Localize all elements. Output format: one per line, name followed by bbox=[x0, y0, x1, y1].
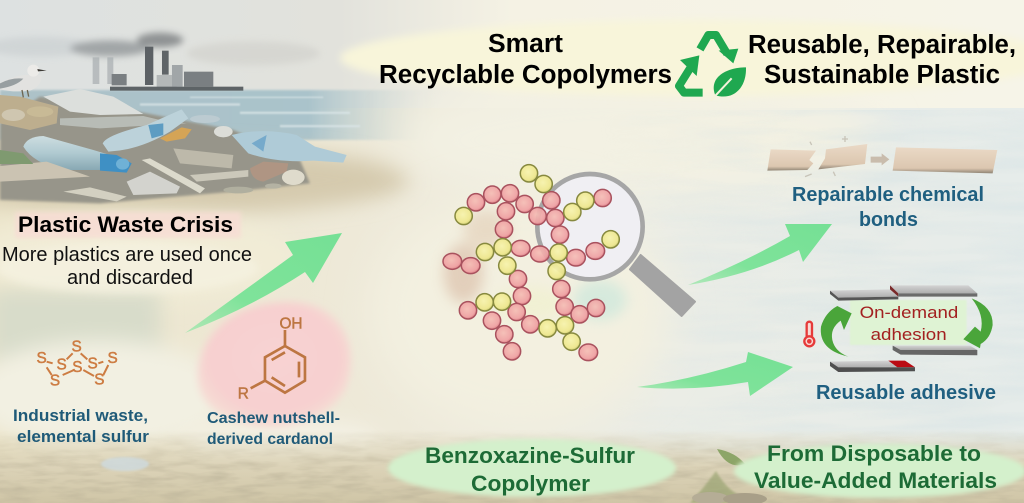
label: from disposable to value-added materials: Value-Added Materials bbox=[754, 468, 997, 493]
factory bbox=[93, 47, 243, 91]
chemical structure: elemental sulfur S8 bbox=[37, 339, 118, 389]
title: smart recyclable copolymers bbox=[379, 30, 672, 89]
chemical structure: elemental sulfur S8: S bbox=[37, 350, 47, 367]
chemical structure: elemental sulfur S8: S bbox=[88, 356, 98, 373]
text: industrial waste, elemental sulfur: elemental sulfur bbox=[17, 428, 150, 446]
chemical structure: cardanol bbox=[238, 316, 305, 403]
colourful haze bbox=[443, 210, 627, 320]
clouds and smoke bbox=[0, 33, 320, 65]
on-demand adhesion text: adhesion bbox=[871, 325, 947, 344]
text: repairable chemical bonds bbox=[792, 184, 984, 231]
chemical structure: elemental sulfur S8: S bbox=[72, 339, 82, 356]
polymer beads bbox=[443, 165, 619, 361]
bottle: right bbox=[232, 131, 347, 163]
on-demand adhesion text bbox=[860, 303, 958, 344]
diagram: on-demand adhesion cycle bbox=[804, 285, 993, 372]
on-demand adhesion text: On-demand bbox=[860, 303, 958, 322]
arrow: feedstocks to copolymer bbox=[185, 233, 342, 333]
label: from disposable to value-added materials bbox=[734, 441, 1024, 498]
illustration: polluted beach with factory, gull and plastic waste bbox=[0, 33, 360, 203]
debris pile bbox=[0, 97, 310, 203]
bottle: large left bbox=[23, 136, 132, 173]
cycle arrows bbox=[821, 298, 993, 357]
chemical structure: elemental sulfur S8: S bbox=[94, 372, 104, 389]
bottle: upper middle bbox=[103, 109, 188, 152]
icon: magnifying glass bbox=[537, 174, 695, 316]
arrow: copolymer to reusable adhesive bbox=[637, 352, 793, 396]
chemical structure: elemental sulfur S8: S bbox=[72, 359, 82, 376]
subtitle: reusable, repairable, sustainable plastic: Reusable, Repairable, bbox=[748, 31, 1016, 59]
chemical structure: cardanol: OH bbox=[279, 316, 302, 333]
icon: recycling arrows with leaf bbox=[679, 35, 746, 101]
subtitle: reusable, repairable, sustainable plastic bbox=[748, 31, 1016, 89]
cashew fruit background bbox=[198, 302, 351, 427]
icon: thermometer bbox=[804, 322, 814, 346]
text block: plastic waste crisis: Plastic Waste Crisis bbox=[18, 212, 233, 237]
chemical structure: cardanol: R bbox=[238, 386, 249, 403]
centre panel bbox=[850, 300, 967, 345]
text: cashew nutshell-derived cardanol bbox=[207, 410, 340, 448]
text block: plastic waste crisis bbox=[0, 212, 258, 294]
adhesive plates bbox=[830, 285, 977, 372]
copolymer under magnifying glass bbox=[443, 165, 695, 361]
title: smart recyclable copolymers: Recyclable Copolymers bbox=[379, 61, 672, 89]
title banner bbox=[340, 20, 1024, 96]
text: repairable chemical bonds: Repairable chemical bbox=[792, 184, 984, 206]
scattered rubbish bbox=[0, 106, 305, 201]
icon: broken and repaired plastic piece bbox=[767, 136, 997, 177]
text: cashew nutshell-derived cardanol: Cashew nutshell- bbox=[207, 410, 340, 427]
text: reusable adhesive: Reusable adhesive bbox=[816, 382, 996, 404]
seagull bbox=[0, 65, 47, 97]
chemical structure: elemental sulfur S8: S bbox=[108, 350, 118, 367]
subtitle: reusable, repairable, sustainable plastic: Sustainable Plastic bbox=[764, 61, 1000, 89]
sea highlights bbox=[140, 97, 360, 127]
arrow: copolymer to repairable bonds bbox=[688, 224, 832, 285]
text: cashew nutshell-derived cardanol: derived cardanol bbox=[207, 431, 333, 448]
title: smart recyclable copolymers: Smart bbox=[488, 30, 564, 58]
chemical structure: elemental sulfur S8: S bbox=[50, 372, 60, 389]
label: from disposable to value-added materials: From Disposable to bbox=[767, 441, 981, 466]
label: benzoxazine-sulfur copolymer: Copolymer bbox=[471, 471, 590, 496]
chemical structure: elemental sulfur S8: S bbox=[57, 357, 67, 374]
text: industrial waste, elemental sulfur: Industrial waste, bbox=[13, 407, 148, 425]
text block: plastic waste crisis: and discarded bbox=[67, 267, 193, 289]
stones and plants at the shore bbox=[690, 449, 767, 503]
text: repairable chemical bonds: bonds bbox=[859, 209, 918, 231]
plastic bag bbox=[43, 89, 143, 115]
text: industrial waste, elemental sulfur bbox=[13, 407, 150, 446]
text block: plastic waste crisis: More plastics are used once bbox=[2, 244, 252, 266]
label: benzoxazine-sulfur copolymer bbox=[388, 439, 676, 497]
label: benzoxazine-sulfur copolymer: Benzoxazine-Sulfur bbox=[425, 443, 635, 468]
